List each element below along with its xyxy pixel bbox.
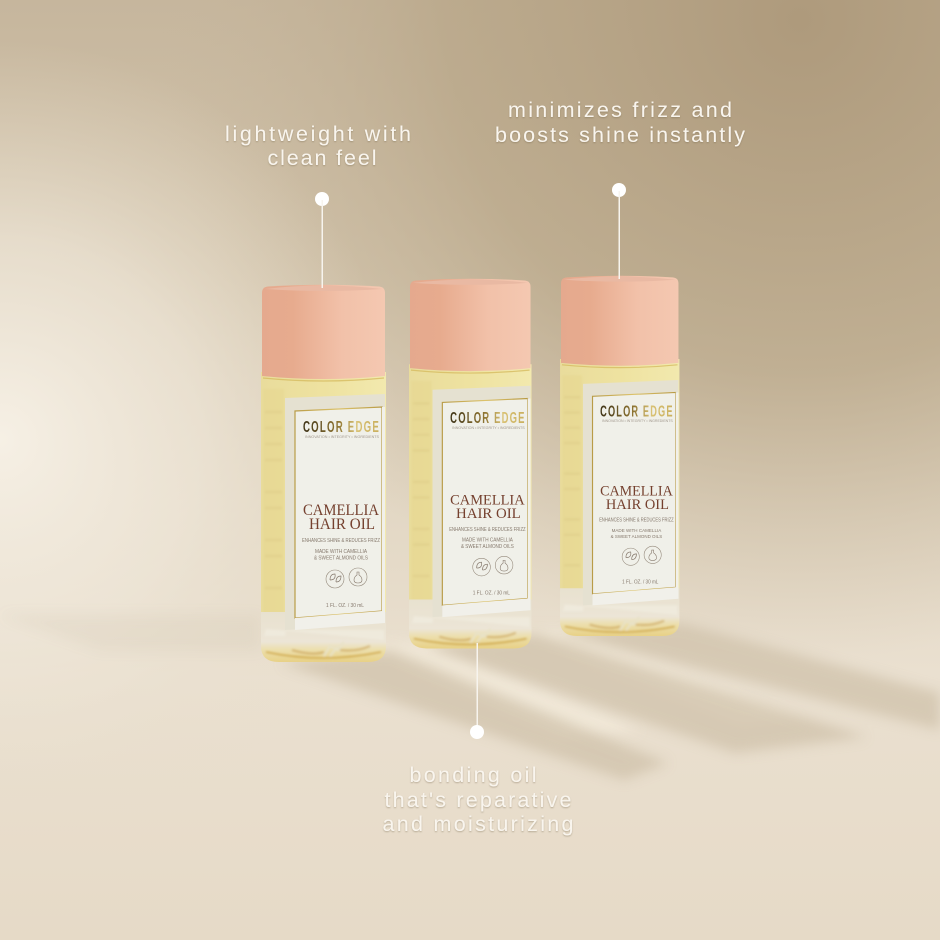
callout: minimizes frizz: boosts shine instantly (495, 123, 745, 147)
callout: lightweight: clean feel (268, 146, 376, 170)
pointer: minimizes frizz (612, 183, 626, 279)
label: middle bottle (449, 410, 526, 597)
callout: bonding oil: and moisturizing (382, 812, 574, 836)
bottle: middle (409, 279, 532, 648)
callout: bonding oil: that's reparative (384, 788, 572, 812)
label: left bottle (302, 419, 380, 609)
bottle: right (560, 276, 679, 636)
pointer: bonding oil (470, 643, 484, 739)
callout: lightweight (225, 122, 411, 288)
pointer: lightweight (315, 192, 329, 288)
callout: bonding oil (382, 643, 574, 836)
bottle: left (261, 285, 386, 662)
label: right bottle (599, 403, 674, 585)
callout: lightweight: lightweight with (225, 122, 411, 146)
callout: minimizes frizz (495, 98, 745, 279)
callout: bonding oil: bonding oil (410, 763, 536, 787)
light streaks (350, 630, 800, 740)
cast shadows (0, 615, 940, 780)
callout: minimizes frizz: minimizes frizz and (508, 98, 732, 122)
